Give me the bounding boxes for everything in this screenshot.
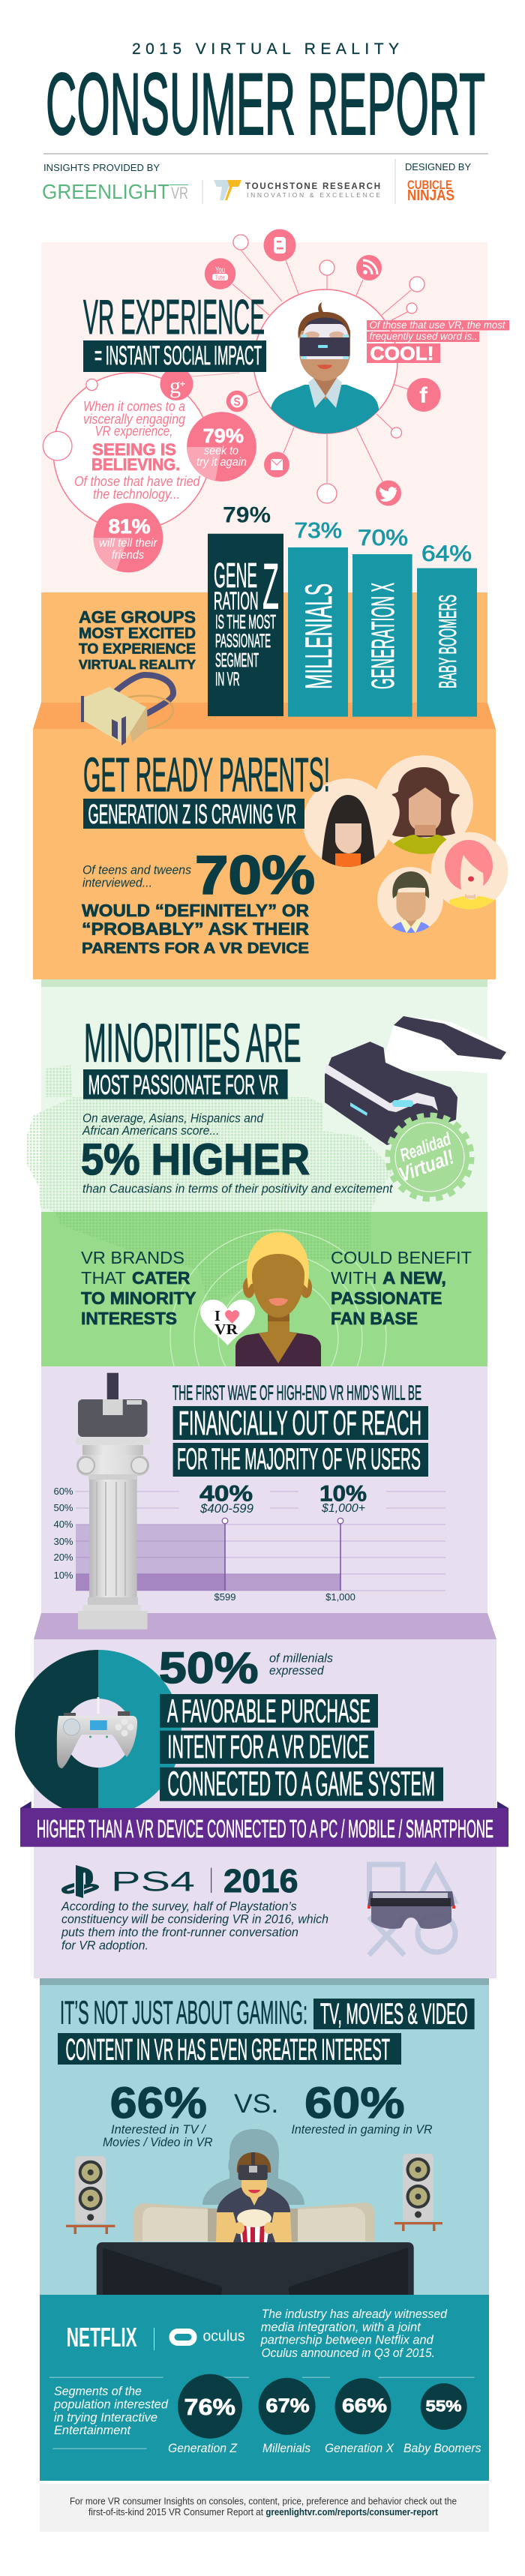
face (242, 2179, 267, 2198)
figure: woman (236, 1232, 321, 1366)
text: of millenials expressed: expressed (269, 1663, 324, 1678)
text: could benefit: A NEW, (382, 1268, 446, 1288)
x axis labels: $599 (214, 1591, 236, 1603)
text: could benefit: FAN BASE (331, 1309, 418, 1328)
bar: Generation Z: IN VR (215, 669, 240, 690)
text: playstation paragraph (61, 1899, 328, 1952)
icon: RSS (356, 255, 382, 280)
logo: GreenlightVR: VR (171, 184, 188, 202)
bubble copy: SEEING IS (92, 440, 176, 459)
icon: cardboard headset (81, 675, 173, 745)
face: man (377, 867, 443, 933)
text: would ask parents: “PROBABLY” ASK THEIR (82, 919, 309, 939)
y axis labels: 20% (53, 1552, 74, 1563)
vs label: VS. (234, 2089, 279, 2119)
bar: Generation X: 70% (358, 526, 408, 550)
icon: I love VR heart: VR (214, 1321, 238, 1338)
stat: Generation Z 76% (168, 2374, 242, 2455)
text: VR brands: INTERESTS (81, 1309, 177, 1328)
panel background (41, 242, 488, 592)
text: of millenials expressed: of millenials (269, 1651, 333, 1666)
text: VR brands: TO MINORITY (81, 1288, 196, 1308)
icon: Facebook: f (419, 383, 428, 408)
icon: Google plus: g (170, 373, 181, 398)
bar: Millenials: MILLENIALS (298, 583, 340, 689)
logo: Touchstone mark (214, 180, 242, 200)
text: segments: Entertainment (54, 2423, 131, 2437)
bar: Generation Z: Z (262, 551, 279, 623)
stat: Baby Boomers 55%: Baby Boomers (404, 2441, 482, 2455)
logo: Cubicle Ninjas: NINJAS (407, 187, 454, 204)
stat: Millenials 67%: 67% (266, 2395, 310, 2417)
icon: Twitter (376, 480, 401, 505)
icon: YouTube: Tube (215, 274, 225, 282)
40% area (76, 1525, 225, 1591)
bar: Baby Boomers: BABY BOOMERS (434, 595, 461, 688)
callout: most used word: COOL! (370, 343, 434, 364)
icon: Skype: S (234, 396, 241, 409)
popcorn (238, 2221, 270, 2242)
subheading: most passionate (83, 1069, 288, 1100)
text: would ask parents (82, 901, 309, 957)
heading: 2016: 2016 (224, 1863, 298, 1900)
text: VR brands: THAT (81, 1268, 126, 1288)
icon: I love VR heart: I (214, 1308, 220, 1324)
insights label: INSIGHTS PROVIDED BY (44, 162, 160, 173)
face: wavy brown hair (374, 755, 473, 856)
heading: age groups: MOST EXCITED (79, 625, 196, 642)
couch left (133, 2203, 210, 2242)
footer text: For more VR consumer Insights on consoles, content, price, preference and behavior check out the (70, 2495, 457, 2506)
bubble copy: Of those that have tried (74, 474, 200, 489)
text: VR brands (81, 1248, 196, 1328)
text: could benefit: WITH (331, 1268, 376, 1288)
y axis labels: 60% (53, 1486, 74, 1497)
stat: Millenials 67% (259, 2378, 316, 2455)
bar: Generation Z (208, 503, 284, 716)
text: would ask parents: WOULD “DEFINITELY” OR (82, 901, 309, 920)
social node: top (320, 260, 334, 275)
y axis labels: 40% (53, 1519, 74, 1530)
visor (300, 337, 350, 356)
stat: 50%: 50% (159, 1644, 258, 1693)
stat: Generation X 66%: 66% (342, 2395, 387, 2417)
stat: 60%: Interested in gaming in VR (291, 2122, 432, 2137)
icon: mail (264, 451, 290, 477)
callout: most used word: Of those that use VR, the most (369, 319, 506, 331)
y axis labels: 30% (53, 1536, 74, 1547)
bubble copy: BELIEVING. (92, 455, 180, 474)
illustration: television (97, 2242, 414, 2295)
stat: Baby Boomers 55% (404, 2383, 482, 2455)
subheading: most passionate: MOST PASSIONATE FOR VR (88, 1069, 279, 1100)
head (299, 330, 350, 381)
lips (317, 364, 332, 369)
social node: bottom (317, 484, 337, 503)
y axis labels: 50% (53, 1502, 74, 1513)
stat: Millenials 67%: Millenials (262, 2441, 310, 2455)
lilac background (34, 1639, 496, 1978)
couch right (298, 2203, 375, 2242)
footer text: greenlightvr.com/reports/consumer-report (266, 2506, 439, 2518)
illustration: pillar with headset (76, 1373, 150, 1630)
text: playstation paragraph: constituency will be considering VR in 2016, which (62, 1912, 328, 1927)
shadow figure (202, 2129, 304, 2205)
logo: Touchstone text: TOUCHSTONE RESEARCH (245, 182, 380, 191)
logo: Cubicle Ninjas: CUBICLE (407, 178, 452, 192)
smile (248, 2190, 260, 2193)
text: on average (82, 1111, 263, 1138)
neck (314, 377, 337, 400)
green background (41, 1212, 488, 1366)
value: 10%: 10% (320, 1482, 367, 1507)
bar: Millenials (288, 519, 348, 717)
text: could benefit: COULD BENEFIT (331, 1248, 472, 1267)
hands (234, 2222, 244, 2234)
line chart: price segments (53, 1482, 446, 1603)
panel: minority interests (41, 1212, 488, 1366)
panel: get ready parents (33, 675, 508, 979)
stat: Baby Boomers 55%: 55% (426, 2398, 462, 2416)
stat: 79% seek to try again: seek to (204, 445, 238, 457)
bubble copy: the technology... (93, 487, 180, 502)
face: pink hair (430, 832, 508, 910)
sweater (271, 385, 379, 439)
stat: 66%: Interested in TV / (111, 2122, 207, 2137)
bar: Generation X: GENERATION X (365, 583, 401, 689)
10% area (76, 1574, 340, 1591)
bar: Generation Z: RATION (214, 587, 258, 615)
text: would ask parents: PARENTS FOR A VR DEVICE (82, 940, 309, 957)
dotted world map: upper (27, 1065, 394, 1212)
designed by label: DESIGNED BY (405, 161, 471, 172)
panel: minorities: MINORITIES ARE (84, 1014, 302, 1074)
green top band (41, 979, 488, 987)
teal band (40, 1978, 489, 1985)
lilac background (41, 1366, 488, 1613)
social node: left (43, 431, 72, 460)
panel: minorities (27, 979, 517, 1212)
stat: 5% higher: 5% HIGHER (81, 1135, 310, 1184)
panel: VR experience: VR EXPERIENCE (83, 289, 265, 344)
faces group (303, 755, 508, 933)
text: segments: population interested (53, 2398, 169, 2412)
badge: Realidad Virtual: Realidad (398, 1129, 454, 1166)
text: segments (53, 2384, 169, 2437)
icon: VR glasses (368, 1891, 455, 1929)
text: of millenials expressed (269, 1651, 333, 1678)
portrait bubble (254, 289, 398, 439)
text: could benefit (331, 1248, 472, 1328)
subheading: instant social impact: = INSTANT SOCIAL IMPACT (94, 341, 262, 370)
logo: Cubicle Ninjas (407, 178, 454, 204)
icon: VR headset (325, 1016, 517, 1145)
footer text: first-of-its-kind 2015 VR Consumer Report at (88, 2506, 263, 2518)
logo: Oculus: oculus (202, 2329, 244, 2345)
bar chart: age groups (208, 503, 477, 717)
stat: 60%: 60% (304, 2079, 405, 2128)
icon: Google plus: + (180, 379, 185, 389)
text: teens and tweens (82, 863, 191, 890)
logo: PlayStation mark (62, 1865, 99, 1898)
panel: age groups (33, 503, 496, 729)
illustration: left speaker (66, 2156, 115, 2234)
hair (237, 2152, 271, 2173)
ribbon: higher than (20, 1801, 508, 1847)
bar: Generation Z: PASSIONATE (215, 631, 271, 652)
value: 40%: $400-599 (200, 1501, 254, 1516)
panel: VR experience (41, 229, 509, 592)
concentric signal arcs (170, 1229, 387, 1366)
header rule (44, 153, 488, 154)
visor top (303, 324, 348, 337)
text: playstation paragraph: According to the survey, half of Playstation’s (61, 1899, 297, 1913)
social node: empty top (233, 235, 248, 250)
illustration: right speaker (394, 2154, 442, 2231)
text: industry paragraph (260, 2307, 447, 2360)
subheading: generation Z (83, 799, 304, 829)
bar: Baby Boomers: 64% (422, 541, 472, 566)
value: 10%: $1,000+ (321, 1502, 365, 1515)
x axis labels: $1,000 (326, 1591, 356, 1603)
text: industry paragraph: partnership between Netflix and (260, 2333, 434, 2347)
text: industry paragraph: Oculus announced in Q3 of 2015. (262, 2346, 435, 2360)
badge: Realidad Virtual: Virtual! (396, 1145, 457, 1186)
subheading: instant social impact (83, 340, 266, 372)
bar: Generation Z: 79% (223, 503, 271, 528)
text: than caucasians: than Caucasians in terms of their positivity and excitement (82, 1182, 394, 1196)
bar: Generation Z: SEGMENT (215, 649, 259, 671)
text: on average: African Americans score... (82, 1123, 219, 1138)
panel: Netflix and Oculus (40, 2295, 489, 2481)
bar: Generation X (352, 526, 412, 717)
dotted world map: lower (56, 1212, 370, 1305)
text: segments: Segments of the (54, 2384, 142, 2398)
panel: gaming (15, 1639, 508, 1978)
text: industry paragraph: media integration, with a joint (261, 2320, 422, 2334)
stat: Generation Z 76%: Generation Z (168, 2441, 238, 2455)
bar: Millenials: 73% (294, 519, 342, 543)
icon: I love VR heart (200, 1300, 255, 1345)
bubble copy: When it comes to a (83, 399, 185, 414)
social node: small right (406, 303, 417, 313)
shirt (217, 2188, 290, 2242)
badge: Realidad Virtual (388, 1116, 471, 1198)
text: on average: On average, Asians, Hispanics and (82, 1111, 263, 1126)
value: 40%: 40% (200, 1482, 253, 1507)
stat: 66%: Movies / Video in VR (103, 2135, 213, 2149)
pale teal background (40, 1985, 489, 2295)
value: 40% (200, 1482, 254, 1516)
orange panel background (33, 729, 496, 979)
callout: most used word (367, 319, 509, 364)
logo: Touchstone text: INNOVATION & EXCELLENCE (247, 191, 380, 199)
stat: 70%: 70% (195, 846, 315, 906)
illustration: viewer on couch (133, 2129, 375, 2242)
panel: TV movies and video (40, 1978, 489, 2295)
stat: 79% seek to try again: try it again (196, 456, 247, 469)
teal background (40, 2295, 489, 2481)
headset (238, 2165, 268, 2180)
icon: Google plus (160, 367, 194, 400)
social node: small lower right (392, 427, 402, 438)
seeing is believing bubble (43, 373, 211, 530)
heading: age groups (79, 608, 196, 672)
hair (298, 302, 350, 339)
eyebrow title: 2015 VIRTUAL REALITY (132, 40, 399, 58)
bubble copy: VR experience, (94, 424, 172, 439)
panel: price (34, 1366, 496, 1639)
footer (40, 2484, 489, 2532)
logo: PS4 wordmark: PS4 (111, 1867, 195, 1897)
stat: Generation Z 76%: 76% (184, 2394, 236, 2420)
logo: Touchstone text (245, 182, 380, 199)
icon: Blogger (264, 229, 296, 261)
bar: Generation Z: IS THE MOST (215, 610, 276, 633)
subheading: generation Z: GENERATION Z IS CRAVING VR (88, 799, 296, 829)
text: playstation paragraph: for VR adoption. (62, 1938, 148, 1952)
text: VR brands: VR BRANDS (81, 1248, 184, 1267)
heading: age groups: VIRTUAL REALITY (79, 657, 196, 672)
logo: Netflix: NETFLIX (67, 2322, 137, 2353)
social node: small (86, 379, 98, 391)
icon: YouTube: You (215, 265, 225, 275)
text: could benefit: PASSIONATE (331, 1288, 442, 1308)
face: long black hair (303, 778, 392, 868)
bubble copy (74, 399, 200, 502)
stat: Generation X 66%: Generation X (325, 2441, 394, 2455)
icon: Facebook (406, 378, 441, 412)
stat: 81% will tell friends: friends (112, 549, 144, 562)
marker: $1,000 (338, 1518, 344, 1591)
stat: 79% seek to try again (187, 412, 256, 481)
text: VR brands: CATER (132, 1268, 190, 1288)
heading: age groups: AGE GROUPS (79, 608, 196, 627)
logo: GreenlightVR: GREENLIGHT (42, 180, 170, 203)
strap (305, 318, 345, 328)
text: teens and tweens: Of teens and tweens (82, 863, 191, 877)
stat: 79% seek to try again: 79% (202, 424, 244, 447)
text: playstation paragraph: puts them into the front-runner conversation (61, 1925, 298, 1939)
text: teens and tweens: interviewed... (82, 876, 152, 890)
icon: PlayStation symbols (369, 1864, 455, 1955)
stat: Generation X 66% (325, 2378, 394, 2455)
bar: Baby Boomers (417, 541, 477, 717)
collar (308, 378, 342, 408)
stat: 66% (103, 2079, 213, 2149)
y axis labels: 10% (53, 1570, 74, 1581)
stat: 81% will tell friends (94, 503, 163, 572)
orange fold (33, 703, 496, 729)
lilac fold (34, 1613, 496, 1639)
social network connectors (192, 250, 411, 483)
callout: favorable purchase (160, 1693, 378, 1729)
y axis labels (53, 1486, 74, 1581)
bubble copy: viscerally engaging (83, 412, 185, 427)
bar: Generation Z: GENE (214, 556, 257, 595)
stat: 60% (291, 2079, 432, 2137)
callout: most used word: frequently used word is.. (369, 330, 477, 342)
donut chart: 50% (15, 1650, 182, 1816)
icon: game controller (57, 1697, 137, 1768)
orange background (41, 592, 488, 703)
icon: YouTube (205, 258, 236, 289)
footer text (70, 2495, 457, 2518)
icon: Skype (226, 391, 248, 412)
stat: 81% will tell friends: will tell their (99, 537, 158, 550)
grid lines (76, 1492, 446, 1591)
x axis labels (214, 1591, 356, 1603)
logo: Oculus (172, 2329, 244, 2345)
text: segments: in trying Interactive (54, 2410, 158, 2425)
divider lines (50, 2377, 475, 2449)
text: industry paragraph: The industry has already witnessed (262, 2307, 447, 2321)
header (42, 40, 488, 204)
callout: intent (160, 1729, 374, 1765)
stat: 81% will tell friends: 81% (108, 515, 150, 538)
arms (216, 2212, 238, 2242)
heading: age groups: TO EXPERIENCE (79, 641, 196, 658)
marker: $599 (222, 1518, 228, 1591)
pale green background (41, 987, 488, 1212)
footer background (40, 2484, 489, 2532)
social node: upper right (410, 277, 424, 292)
stat: 66%: 66% (110, 2079, 207, 2128)
